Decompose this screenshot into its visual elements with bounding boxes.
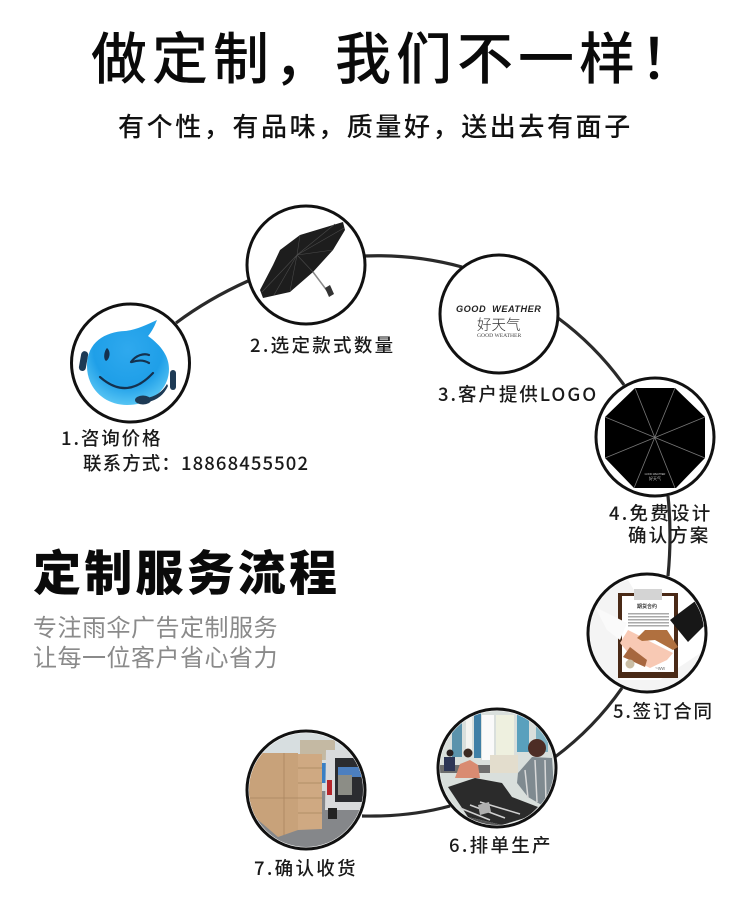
step 3: logo: GOOD WEATHER: [477, 333, 521, 339]
label 6: 6.排单生产: [449, 832, 553, 858]
label 3: 3.客户提供LOGO: [438, 381, 598, 407]
step 2: folded black umbrella: [247, 206, 365, 324]
van: [325, 750, 364, 810]
icon: blue water drop: [87, 320, 169, 405]
step 5: contract handshake: [588, 574, 707, 692]
title: 做定制，我们不一样！: [91, 15, 701, 96]
step 1: customer service mascot: [72, 304, 190, 422]
label 2: 2.选定款式数量: [250, 332, 395, 358]
section heading: 定制服务流程: [33, 534, 340, 604]
step 3: logo: 好天气: [477, 314, 520, 335]
clipboard: [618, 593, 678, 678]
label 1: 1.咨询价格: [61, 425, 162, 451]
label 1: 联系方式：18868455502: [83, 450, 309, 476]
label 1: [61, 425, 309, 476]
subtitle: 有个性，有品味，质量好，送出去有面子: [118, 107, 633, 144]
logo wordmark: GOOD WEATHER: [456, 304, 541, 314]
label 7: 7.确认收货: [254, 855, 358, 881]
icon: headset: [78, 351, 176, 404]
process connecting curve: [176, 256, 670, 816]
step 6: factory photo: [437, 708, 557, 830]
step 5: contract handshake: 期货合约: [637, 603, 657, 610]
hands: [670, 602, 704, 642]
section description: 让每一位客户省心省力: [33, 638, 278, 673]
label 4: [609, 500, 713, 548]
step 7: delivery photo: [246, 731, 366, 851]
step 5: contract handshake: ~ww: [655, 666, 666, 672]
label 5: 5.签订合同: [613, 698, 714, 724]
step 4: umbrella top view: [596, 378, 714, 496]
stacked boxes: [246, 753, 298, 837]
step 4: umbrella top view: GOOD WEATHER: [645, 473, 666, 476]
section description: 专注雨伞广告定制服务: [33, 608, 278, 643]
step 4: umbrella top view: 好天气: [649, 475, 661, 482]
section description: [33, 608, 278, 673]
label 4: 4.免费设计: [609, 500, 713, 526]
step 3: logo: [440, 255, 558, 373]
label 4: 确认方案: [628, 522, 710, 548]
